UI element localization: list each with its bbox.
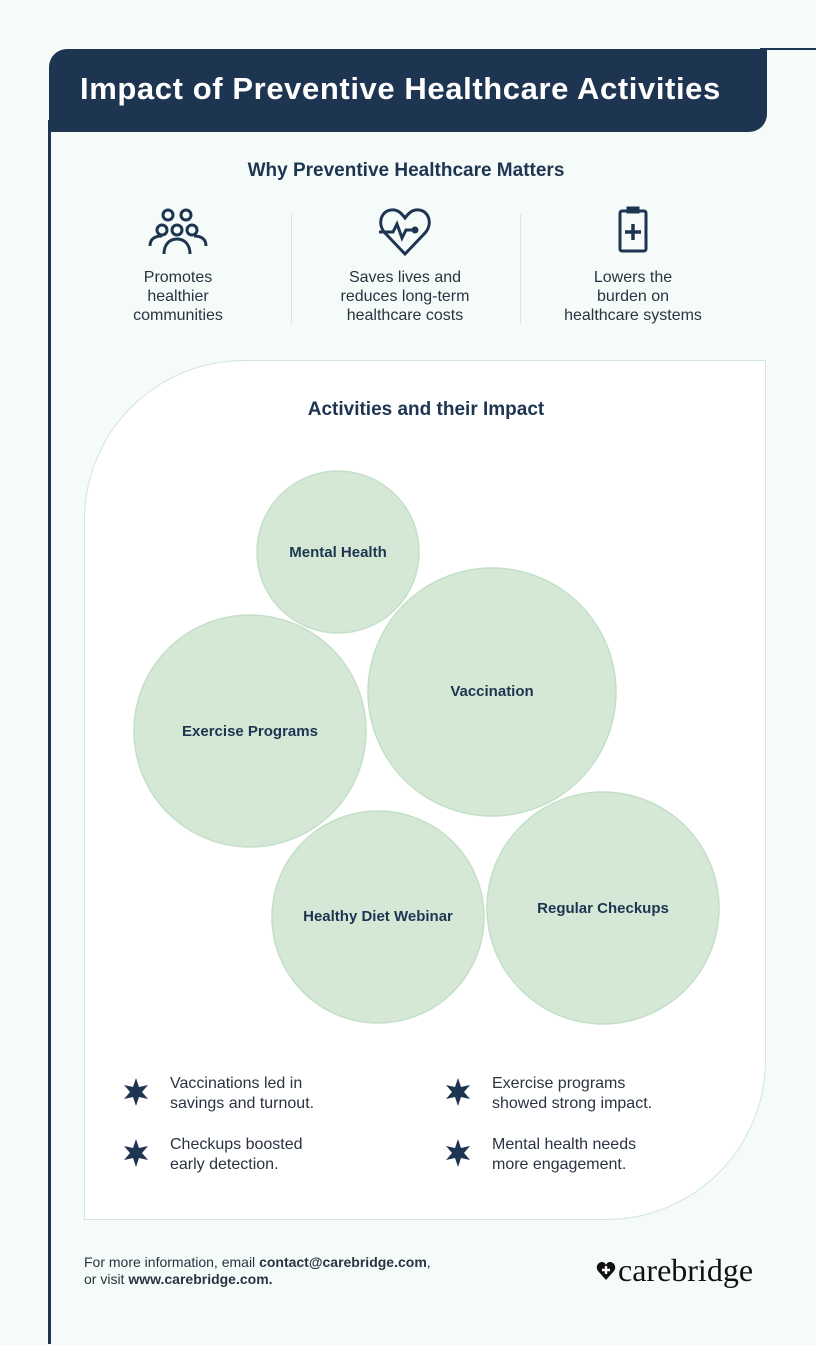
feature: burden xyxy=(564,206,702,324)
icon: heart pulse xyxy=(379,208,431,256)
bubble: healthy diet: Healthy Diet Webinar xyxy=(303,908,453,925)
panel: activities xyxy=(84,360,766,1220)
bullet: vaccinations xyxy=(124,1075,314,1112)
bullet: exercise: showed strong impact. xyxy=(492,1095,652,1112)
feature: saves lives xyxy=(341,208,469,324)
bullet: checkups: Checkups boosted xyxy=(170,1136,303,1153)
bullet: checkups xyxy=(124,1136,303,1173)
title banner: Impact of Preventive Healthcare Activities xyxy=(80,71,721,106)
feature: communities: Promotes xyxy=(144,269,212,286)
bullet: vaccinations: savings and turnout. xyxy=(170,1095,314,1112)
feature: communities xyxy=(133,208,223,324)
footer contact: For more information, email contact@carebridge.com, xyxy=(84,1254,431,1270)
feature: communities: communities xyxy=(133,307,223,324)
icon: clipboard xyxy=(618,206,648,252)
feature: burden: healthcare systems xyxy=(564,307,702,324)
bubble: mental health: Mental Health xyxy=(289,544,387,561)
bubble: vaccination xyxy=(368,568,616,816)
bullet: vaccinations: Vaccinations led in xyxy=(170,1075,302,1092)
feature: burden: Lowers the xyxy=(594,269,672,286)
bubble: exercise: Exercise Programs xyxy=(182,723,318,740)
left frame line xyxy=(48,120,51,1344)
feature: burden: burden on xyxy=(597,288,669,305)
feature: saves lives: healthcare costs xyxy=(347,307,463,324)
subheading: why: Why Preventive Healthcare Matters xyxy=(248,160,564,181)
bullet: exercise: Exercise programs xyxy=(492,1075,625,1092)
bullet: exercise xyxy=(446,1075,652,1112)
bullet: checkups: early detection. xyxy=(170,1156,279,1173)
bubble: mental health xyxy=(257,471,419,633)
icon: people xyxy=(148,208,208,254)
bubble: checkups xyxy=(487,792,719,1024)
bubble: exercise xyxy=(134,615,366,847)
bullet: mental health: more engagement. xyxy=(492,1156,626,1173)
divider xyxy=(291,214,292,324)
bubble: vaccination: Vaccination xyxy=(450,683,534,700)
feature: communities: healthier xyxy=(147,288,209,305)
panel heading: Activities and their Impact xyxy=(308,399,544,420)
top right frame line xyxy=(760,48,816,50)
divider xyxy=(520,214,521,324)
bullet: mental health: Mental health needs xyxy=(492,1136,636,1153)
footer contact: or visit www.carebridge.com. xyxy=(84,1271,273,1287)
feature: saves lives: reduces long-term xyxy=(341,288,469,305)
bullet: mental health xyxy=(446,1136,636,1173)
title banner xyxy=(49,49,767,132)
bubble: healthy diet xyxy=(272,811,484,1023)
bubble: checkups: Regular Checkups xyxy=(537,900,669,917)
logo: carebridge xyxy=(618,1252,753,1288)
feature: saves lives: Saves lives and xyxy=(349,269,461,286)
footer contact xyxy=(84,1254,431,1287)
